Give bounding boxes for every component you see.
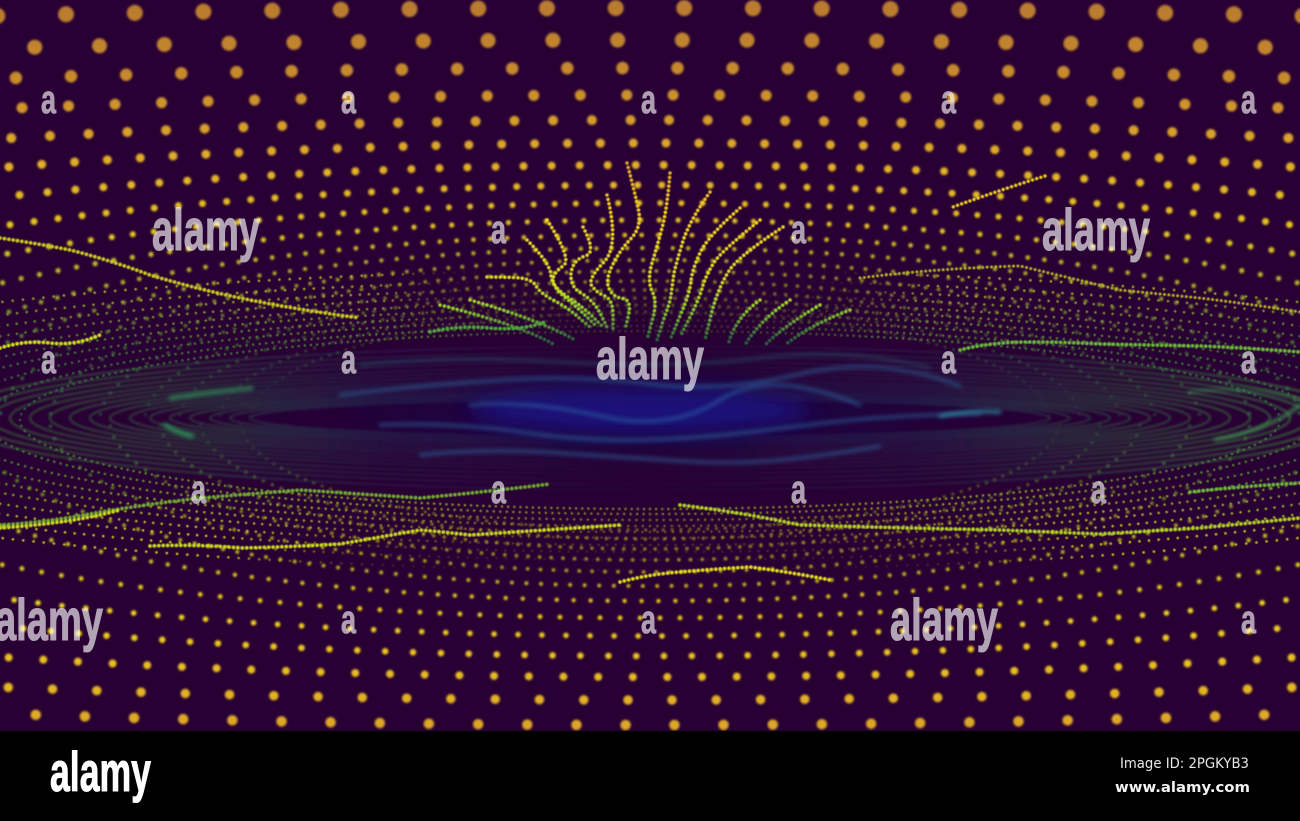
- lower dot rings: [0, 423, 1300, 731]
- blue ripple lines: [340, 354, 980, 463]
- watermark: large alamy logos: alamy: [596, 327, 704, 392]
- watermark: small alamy marks: a: [941, 78, 957, 122]
- watermark: large alamy logos: alamy: [1042, 198, 1150, 263]
- watermark: small alamy marks: a: [1241, 598, 1257, 642]
- website url: www.alamy.com: [1115, 780, 1250, 796]
- watermark: small alamy marks: a: [341, 78, 357, 122]
- watermark: small alamy marks: a: [341, 598, 357, 642]
- green ring highlights: [165, 388, 1300, 440]
- watermark: small alamy marks: a: [1091, 468, 1107, 512]
- bright wave bands: [0, 238, 1300, 582]
- watermark: small alamy marks: a: [641, 598, 657, 642]
- watermark: small alamy marks: a: [491, 468, 507, 512]
- dense side dot rings: [0, 270, 1300, 570]
- watermark: small alamy marks: a: [791, 468, 807, 512]
- watermark: small alamy marks: a: [341, 338, 357, 382]
- inner concentric rings: [0, 346, 1300, 490]
- watermark: large alamy logos: alamy: [890, 588, 998, 653]
- blue central glow: [470, 388, 810, 432]
- watermark: large alamy logos: [0, 198, 1150, 653]
- watermark: small alamy marks: a: [1241, 78, 1257, 122]
- dark central basin: [90, 345, 1210, 485]
- watermark: small alamy marks: a: [1241, 338, 1257, 382]
- central wavy rays: [440, 163, 1045, 345]
- footer logo: alamy: [50, 740, 151, 803]
- watermark: small alamy marks: a: [41, 338, 57, 382]
- watermark: small alamy marks: a: [791, 208, 807, 252]
- watermark: small alamy marks: a: [41, 78, 57, 122]
- watermark: large alamy logos: alamy: [152, 198, 260, 263]
- upper dot rings: [0, 0, 1300, 417]
- footer band: [0, 731, 1300, 821]
- watermark: small alamy marks: a: [941, 338, 957, 382]
- watermark: small alamy marks: a: [191, 468, 207, 512]
- watermark: small alamy marks: a: [491, 208, 507, 252]
- image id: Image ID: 2PGKYB3: [1120, 756, 1249, 772]
- watermark: small alamy marks: a: [641, 78, 657, 122]
- watermark: small alamy marks: [41, 78, 1257, 642]
